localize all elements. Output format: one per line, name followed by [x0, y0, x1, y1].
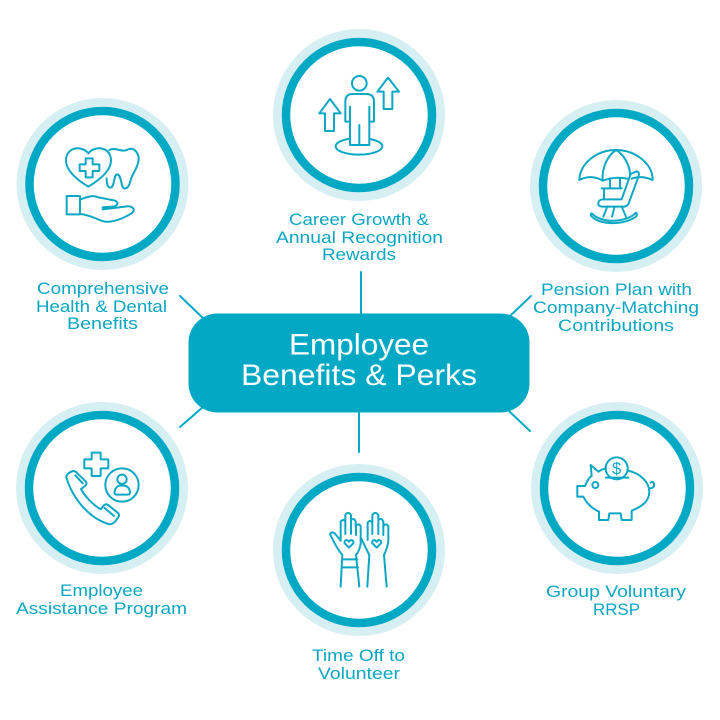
- central box: Employee Benefits & Perks: [188, 314, 530, 412]
- label: Comprehensive Health & Dental Benefits: Comprehensive: [37, 279, 169, 298]
- label: Comprehensive Health & Dental Benefits: Benefits: [67, 314, 138, 333]
- connector lines: [180, 272, 531, 452]
- label: Group Voluntary RRSP: [546, 582, 687, 619]
- icon: person with arrows: [319, 76, 399, 155]
- icon: piggy bank with coin: $: [612, 459, 621, 478]
- label: Group Voluntary RRSP: RRSP: [593, 600, 640, 619]
- icon: umbrella and rocking chair: [579, 150, 653, 223]
- label: Comprehensive Health & Dental Benefits: Health & Dental: [36, 297, 167, 316]
- panel: group voluntary RRSP: [531, 402, 703, 619]
- label: Pension Plan with Company-Matching Contributions: Company-Matching: [533, 298, 699, 317]
- label: Employee Assistance Program: [16, 581, 187, 618]
- label: Career Growth & Annual Recognition Rewards: [276, 210, 443, 264]
- icon: phone, cross and person: [66, 453, 139, 524]
- label: Pension Plan with Company-Matching Contributions: Pension Plan with: [541, 280, 692, 299]
- label: Career Growth & Annual Recognition Rewards: Annual Recognition: [276, 228, 443, 247]
- label: Comprehensive Health & Dental Benefits: [36, 279, 169, 333]
- label: Pension Plan with Company-Matching Contributions: Contributions: [558, 316, 674, 335]
- label: Career Growth & Annual Recognition Rewards: Rewards: [322, 245, 396, 264]
- label: Employee Assistance Program: Employee: [60, 581, 143, 600]
- central box: Employee Benefits & Perks: Employee: [289, 328, 429, 362]
- label: Time Off to Volunteer: [312, 646, 405, 683]
- icon: piggy bank with coin: [577, 457, 654, 520]
- label: Time Off to Volunteer: Volunteer: [318, 664, 400, 683]
- label: Time Off to Volunteer: Time Off to: [312, 646, 405, 665]
- label: Group Voluntary RRSP: Group Voluntary: [546, 582, 687, 601]
- panel: time off to volunteer: [273, 464, 445, 683]
- label: Pension Plan with Company-Matching Contributions: [533, 280, 699, 335]
- icon: heart, tooth and hand: [66, 148, 139, 222]
- label: Career Growth & Annual Recognition Rewards: Career Growth &: [289, 210, 430, 229]
- panel: pension plan: [530, 100, 702, 335]
- central box: Employee Benefits & Perks: Benefits & Perks: [241, 359, 477, 392]
- panel: health and dental: [16, 98, 188, 333]
- label: Employee Assistance Program: Assistance Program: [16, 599, 187, 618]
- panel: career growth: [273, 29, 445, 264]
- panel: employee assistance: [16, 402, 188, 618]
- icon: raised hands with hearts: [330, 513, 388, 587]
